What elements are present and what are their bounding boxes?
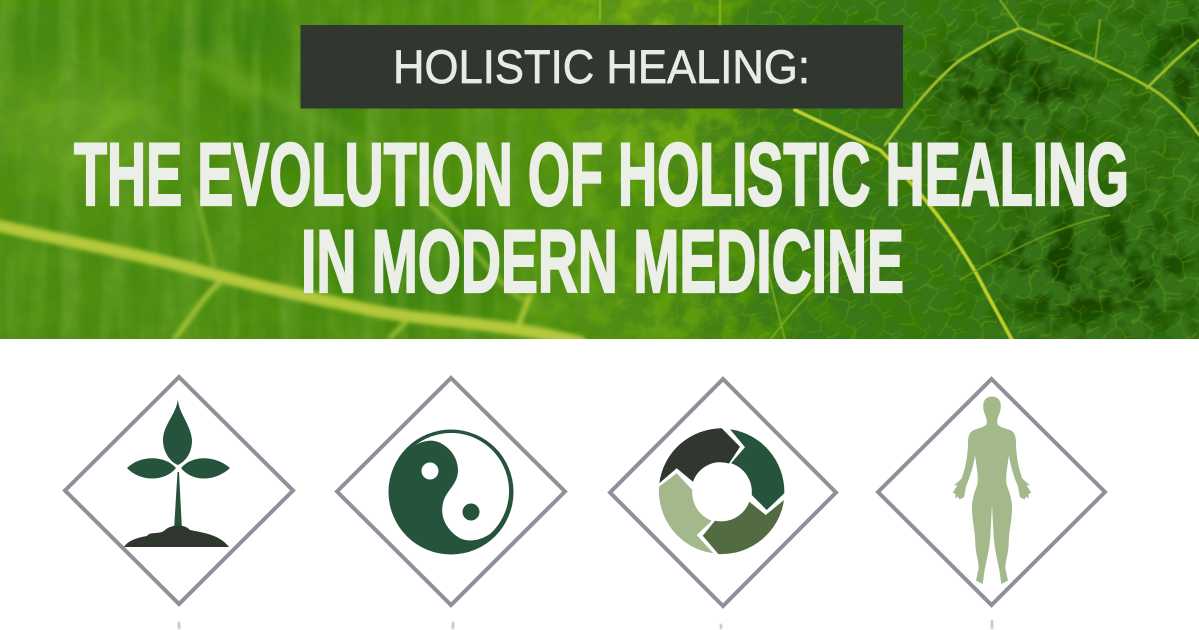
icon: human body in diamond <box>878 379 1105 605</box>
white content panel <box>0 339 1199 630</box>
subtitle text: HOLISTIC HEALING: <box>393 40 810 93</box>
icon: plant in diamond <box>65 377 293 604</box>
tiny marks below icons <box>178 620 993 629</box>
main title <box>74 124 1129 311</box>
icon: yin yang in diamond <box>337 378 565 605</box>
subtitle bar <box>300 25 903 108</box>
icon: cycle arrows in diamond <box>610 379 836 606</box>
leaf photo banner <box>0 0 1199 360</box>
